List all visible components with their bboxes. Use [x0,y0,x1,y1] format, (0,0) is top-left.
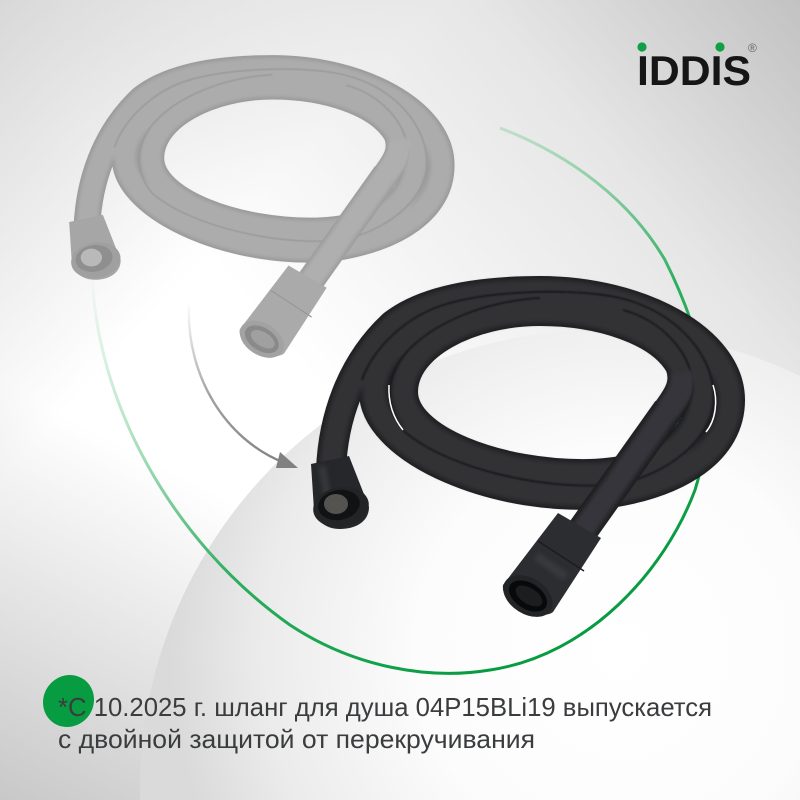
black right connector [496,513,601,626]
black left connector [310,456,372,532]
footnote line 1: *С 10.2025 г. шланг для душа 04P15BLi19 выпускается [58,692,712,722]
green blob behind text [33,665,104,737]
grey left connector [68,215,123,282]
grey hose coils [87,68,441,297]
logo registered mark: ® [748,41,757,55]
logo wordmark: IDDIS [637,47,751,94]
logo [637,41,757,94]
white gaps between coils [389,385,716,432]
footnote line 2: с двойной защитой от перекручивания [58,724,535,754]
black hose coils [331,291,730,548]
grey right connector [233,266,327,366]
green elliptical ring line [92,128,707,673]
black hose (after) [310,291,730,626]
footnote text [58,692,712,754]
grey hose (before) [68,68,441,366]
logo green dots [637,42,725,52]
curved arrow line and head [189,305,298,468]
